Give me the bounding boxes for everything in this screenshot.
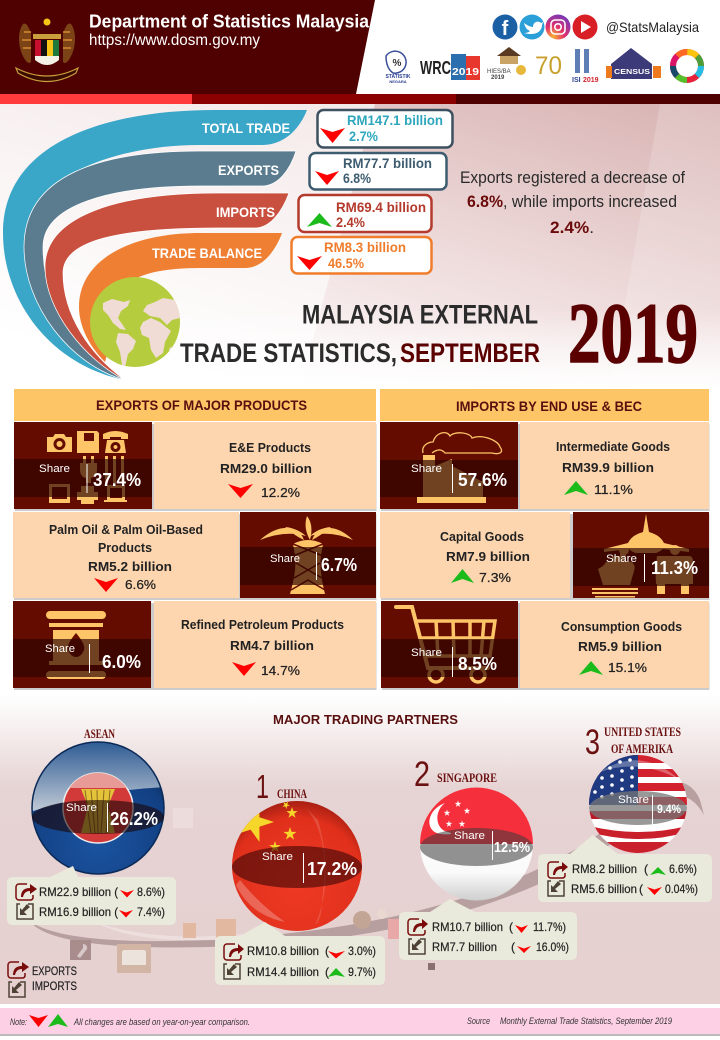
legend: exports and imports: [8, 962, 77, 997]
sphere: China: [229, 768, 362, 931]
callout: China trade: RM14.4 billion: [247, 965, 319, 979]
value box: trade balance: 46.5%: [328, 255, 364, 271]
panel: refined petroleum: [13, 601, 376, 690]
icon: shopping cart: [396, 607, 495, 682]
panel: palm oil: [13, 512, 376, 600]
title: SEPTEMBER: [400, 338, 540, 368]
sphere: ASEAN: Share: [66, 802, 97, 814]
callout: ASEAN trade: RM22.9 billion (: [39, 885, 118, 899]
panel: consumption goods: Consumption Goods: [561, 619, 682, 634]
callout: ASEAN trade: 7.4%): [137, 905, 165, 919]
panel: E&E products: E&E Products: [229, 440, 311, 455]
panel: palm oil: Products: [98, 540, 152, 555]
partner logos: 70: [535, 52, 562, 80]
panel header: exports of major products: EXPORTS OF MAJOR PRODUCTS: [96, 397, 307, 413]
value box: exports: RM77.7 billion: [343, 155, 432, 171]
callout: United States trade: (: [644, 862, 648, 876]
partner logos: 2019: [491, 75, 505, 81]
panel: intermediate goods: RM39.9 billion: [562, 460, 654, 475]
sphere: United States: 9.4%: [657, 802, 681, 816]
callout: China trade: 3.0%): [348, 944, 376, 958]
sphere: ASEAN: 26.2%: [110, 809, 158, 829]
panel: intermediate goods: Share: [411, 463, 442, 475]
title: TRADE STATISTICS,: [180, 338, 397, 368]
panel: refined petroleum: Refined Petroleum Products: [181, 617, 344, 632]
heading: major trading partners: MAJOR TRADING PARTNERS: [273, 712, 458, 727]
panel: consumption goods: RM5.9 billion: [578, 639, 662, 654]
sphere: United States: Share: [618, 794, 649, 806]
sphere: ASEAN: ASEAN: [84, 726, 115, 741]
sphere: United States: [585, 723, 687, 853]
panel: capital goods: Capital Goods: [440, 529, 524, 544]
callout: Singapore trade: RM10.7 billion: [432, 920, 503, 934]
callout: ASEAN trade: RM16.9 billion (: [39, 905, 118, 919]
panel: consumption goods: 15.1%: [608, 660, 647, 675]
arc: total trade: [3, 110, 307, 380]
partner logos: %: [393, 58, 402, 69]
label: total trade: TOTAL TRADE: [202, 120, 290, 136]
panel: capital goods: RM7.9 billion: [446, 549, 530, 564]
arc: trade balance: [79, 233, 282, 362]
icon: oil palm: [260, 516, 353, 594]
label: exports: EXPORTS: [218, 162, 279, 178]
icon: import: [17, 904, 33, 919]
partner logos: WRC: [420, 58, 451, 78]
icon: import: [224, 964, 240, 979]
panel: refined petroleum: 6.0%: [102, 652, 141, 672]
title: MALAYSIA EXTERNAL: [302, 300, 538, 330]
sphere: United States: OF AMERIKA: [611, 741, 673, 756]
value box: imports: 2.4%: [336, 214, 365, 230]
text: summary statement: 2.4%.: [550, 219, 594, 237]
panel: palm oil: 6.7%: [321, 555, 357, 575]
callout: United States trade: (: [639, 882, 643, 896]
value box: trade balance: RM8.3 billion: [324, 239, 406, 255]
arc: exports: [24, 151, 296, 380]
callout: China trade: (: [325, 965, 329, 979]
callout: Singapore trade: RM7.7 billion: [432, 940, 497, 954]
partner logos: CENSUS: [614, 69, 650, 76]
partner logos: ISI: [572, 77, 581, 84]
sphere: Singapore: SINGAPORE: [437, 770, 497, 785]
panel: capital goods: [380, 512, 710, 600]
legend: exports and imports: IMPORTS: [32, 979, 77, 993]
partner logos: HIES/BA: [487, 69, 511, 75]
callout: United States trade: [538, 835, 712, 902]
footer bar: All changes are based on year-on-year comparison.: [73, 1017, 250, 1027]
sphere: China: 1: [256, 768, 269, 805]
icon: import: [409, 939, 425, 954]
label: trade balance: TRADE BALANCE: [152, 245, 262, 261]
panel: intermediate goods: [380, 422, 710, 511]
callout: Singapore trade: (: [509, 920, 513, 934]
label: imports: IMPORTS: [216, 204, 275, 220]
sphere: Singapore: [414, 755, 534, 900]
value box: imports: RM69.4 billion: [336, 199, 426, 215]
panel: refined petroleum: RM4.7 billion: [230, 638, 314, 653]
panel: consumption goods: 8.5%: [458, 654, 497, 674]
social handle: @StatsMalaysia: [606, 19, 699, 35]
callout: China trade: [215, 922, 385, 985]
panel: refined petroleum: 14.7%: [261, 663, 300, 678]
icon: export: [16, 884, 37, 900]
sphere: Singapore: 2: [414, 755, 430, 794]
icon: plane, ship and bus: [592, 514, 693, 598]
callout: China trade: (: [325, 944, 329, 958]
sphere: United States: UNITED STATES: [604, 724, 681, 739]
callout: Singapore trade: [399, 899, 577, 960]
panel: E&E products: 12.2%: [261, 485, 300, 500]
value box: exports: 6.8%: [343, 170, 371, 186]
panel: refined petroleum: Share: [45, 643, 75, 655]
icon: export: [408, 919, 428, 935]
icon: export: [548, 862, 568, 878]
arc: imports: [45, 193, 289, 380]
sphere: United States: 3: [585, 723, 600, 762]
header band: [0, 0, 720, 104]
footer bar: Monthly External Trade Statistics, September 2019: [500, 1016, 672, 1026]
panel: palm oil: Share: [270, 553, 300, 565]
panel: consumption goods: [381, 601, 710, 690]
panel: capital goods: Share: [606, 553, 637, 565]
icon: oil barrel: [46, 611, 106, 679]
sphere: ASEAN: [30, 726, 166, 874]
sphere: China: 17.2%: [307, 859, 357, 879]
icon: electronics: [47, 431, 128, 504]
background: lower section: [0, 695, 720, 1008]
header url: https://www.dosm.gov.my: [89, 32, 260, 49]
icon: globe: [90, 277, 182, 367]
sphere: Singapore: Share: [454, 830, 485, 842]
partner logos: 2019: [452, 67, 480, 78]
sphere: China: Share: [262, 851, 293, 863]
panel header: imports by end use: [380, 389, 709, 421]
panel: E&E products: Share: [39, 463, 70, 475]
callout: China trade: RM10.8 billion: [247, 944, 319, 958]
partner logos: 2019: [583, 77, 599, 84]
text: summary statement: [460, 169, 685, 237]
social icons: f: [502, 18, 509, 40]
panel: intermediate goods: 11.1%: [594, 482, 633, 497]
callout: United States trade: 0.04%): [665, 882, 698, 896]
panel: capital goods: 7.3%: [479, 570, 511, 585]
panel: intermediate goods: Intermediate Goods: [556, 439, 670, 454]
panel: palm oil: Palm Oil & Palm Oil-Based: [49, 522, 203, 537]
sphere: Singapore: 12.5%: [494, 839, 530, 856]
callout: China trade: 9.7%): [348, 965, 376, 979]
value box: total trade: RM147.1 billion: [347, 112, 443, 128]
icon: export: [224, 944, 244, 960]
title: [180, 300, 540, 368]
header title: Department of Statistics Malaysia: [89, 12, 370, 32]
value box: exports: [310, 153, 446, 190]
value box: total trade: 2.7%: [349, 128, 378, 144]
panel: palm oil: 6.6%: [125, 577, 156, 592]
callout: Singapore trade: (: [511, 940, 515, 954]
legend: exports and imports: EXPORTS: [32, 964, 77, 978]
callout: Singapore trade: 11.7%): [533, 920, 566, 934]
footer bar: Source: [467, 1016, 490, 1026]
panel: E&E products: [14, 422, 376, 511]
panel header: imports by end use: IMPORTS BY END USE & BEC: [456, 398, 642, 414]
social icons: [492, 14, 598, 40]
icon: Malaysian coat of arms: [16, 18, 78, 82]
text: summary statement: Exports registered a decrease of: [460, 169, 685, 187]
footer bar: [0, 1004, 720, 1036]
callout: United States trade: 6.6%): [669, 862, 697, 876]
panel: palm oil: RM5.2 billion: [88, 559, 172, 574]
panel: intermediate goods: 57.6%: [458, 470, 507, 490]
partner logos: STATISTIK: [385, 74, 411, 80]
callout: United States trade: RM5.6 billion: [571, 882, 637, 896]
panel header: exports of major products: [14, 389, 376, 421]
callout: United States trade: RM8.2 billion: [572, 862, 637, 876]
sphere: China: CHINA: [277, 786, 307, 801]
background: top section: [0, 104, 720, 389]
panel: consumption goods: Share: [411, 647, 442, 659]
partner logos: [385, 47, 701, 84]
icon: factory: [417, 433, 502, 503]
partner logos: NEGARA: [389, 79, 407, 84]
value box: trade balance: [292, 237, 432, 274]
panel: E&E products: 37.4%: [93, 470, 141, 490]
value box: total trade: [318, 110, 452, 148]
callout: ASEAN trade: 8.6%): [137, 885, 165, 899]
value box: imports: [298, 195, 432, 232]
footer bar: Note:: [10, 1017, 27, 1027]
callout: ASEAN trade: [7, 866, 176, 925]
panel: capital goods: 11.3%: [651, 558, 698, 578]
text: summary statement: 6.8%, while imports increased: [467, 193, 677, 211]
icon: import: [548, 881, 564, 896]
callout: Singapore trade: 16.0%): [536, 940, 569, 954]
panel: E&E products: RM29.0 billion: [220, 461, 312, 476]
